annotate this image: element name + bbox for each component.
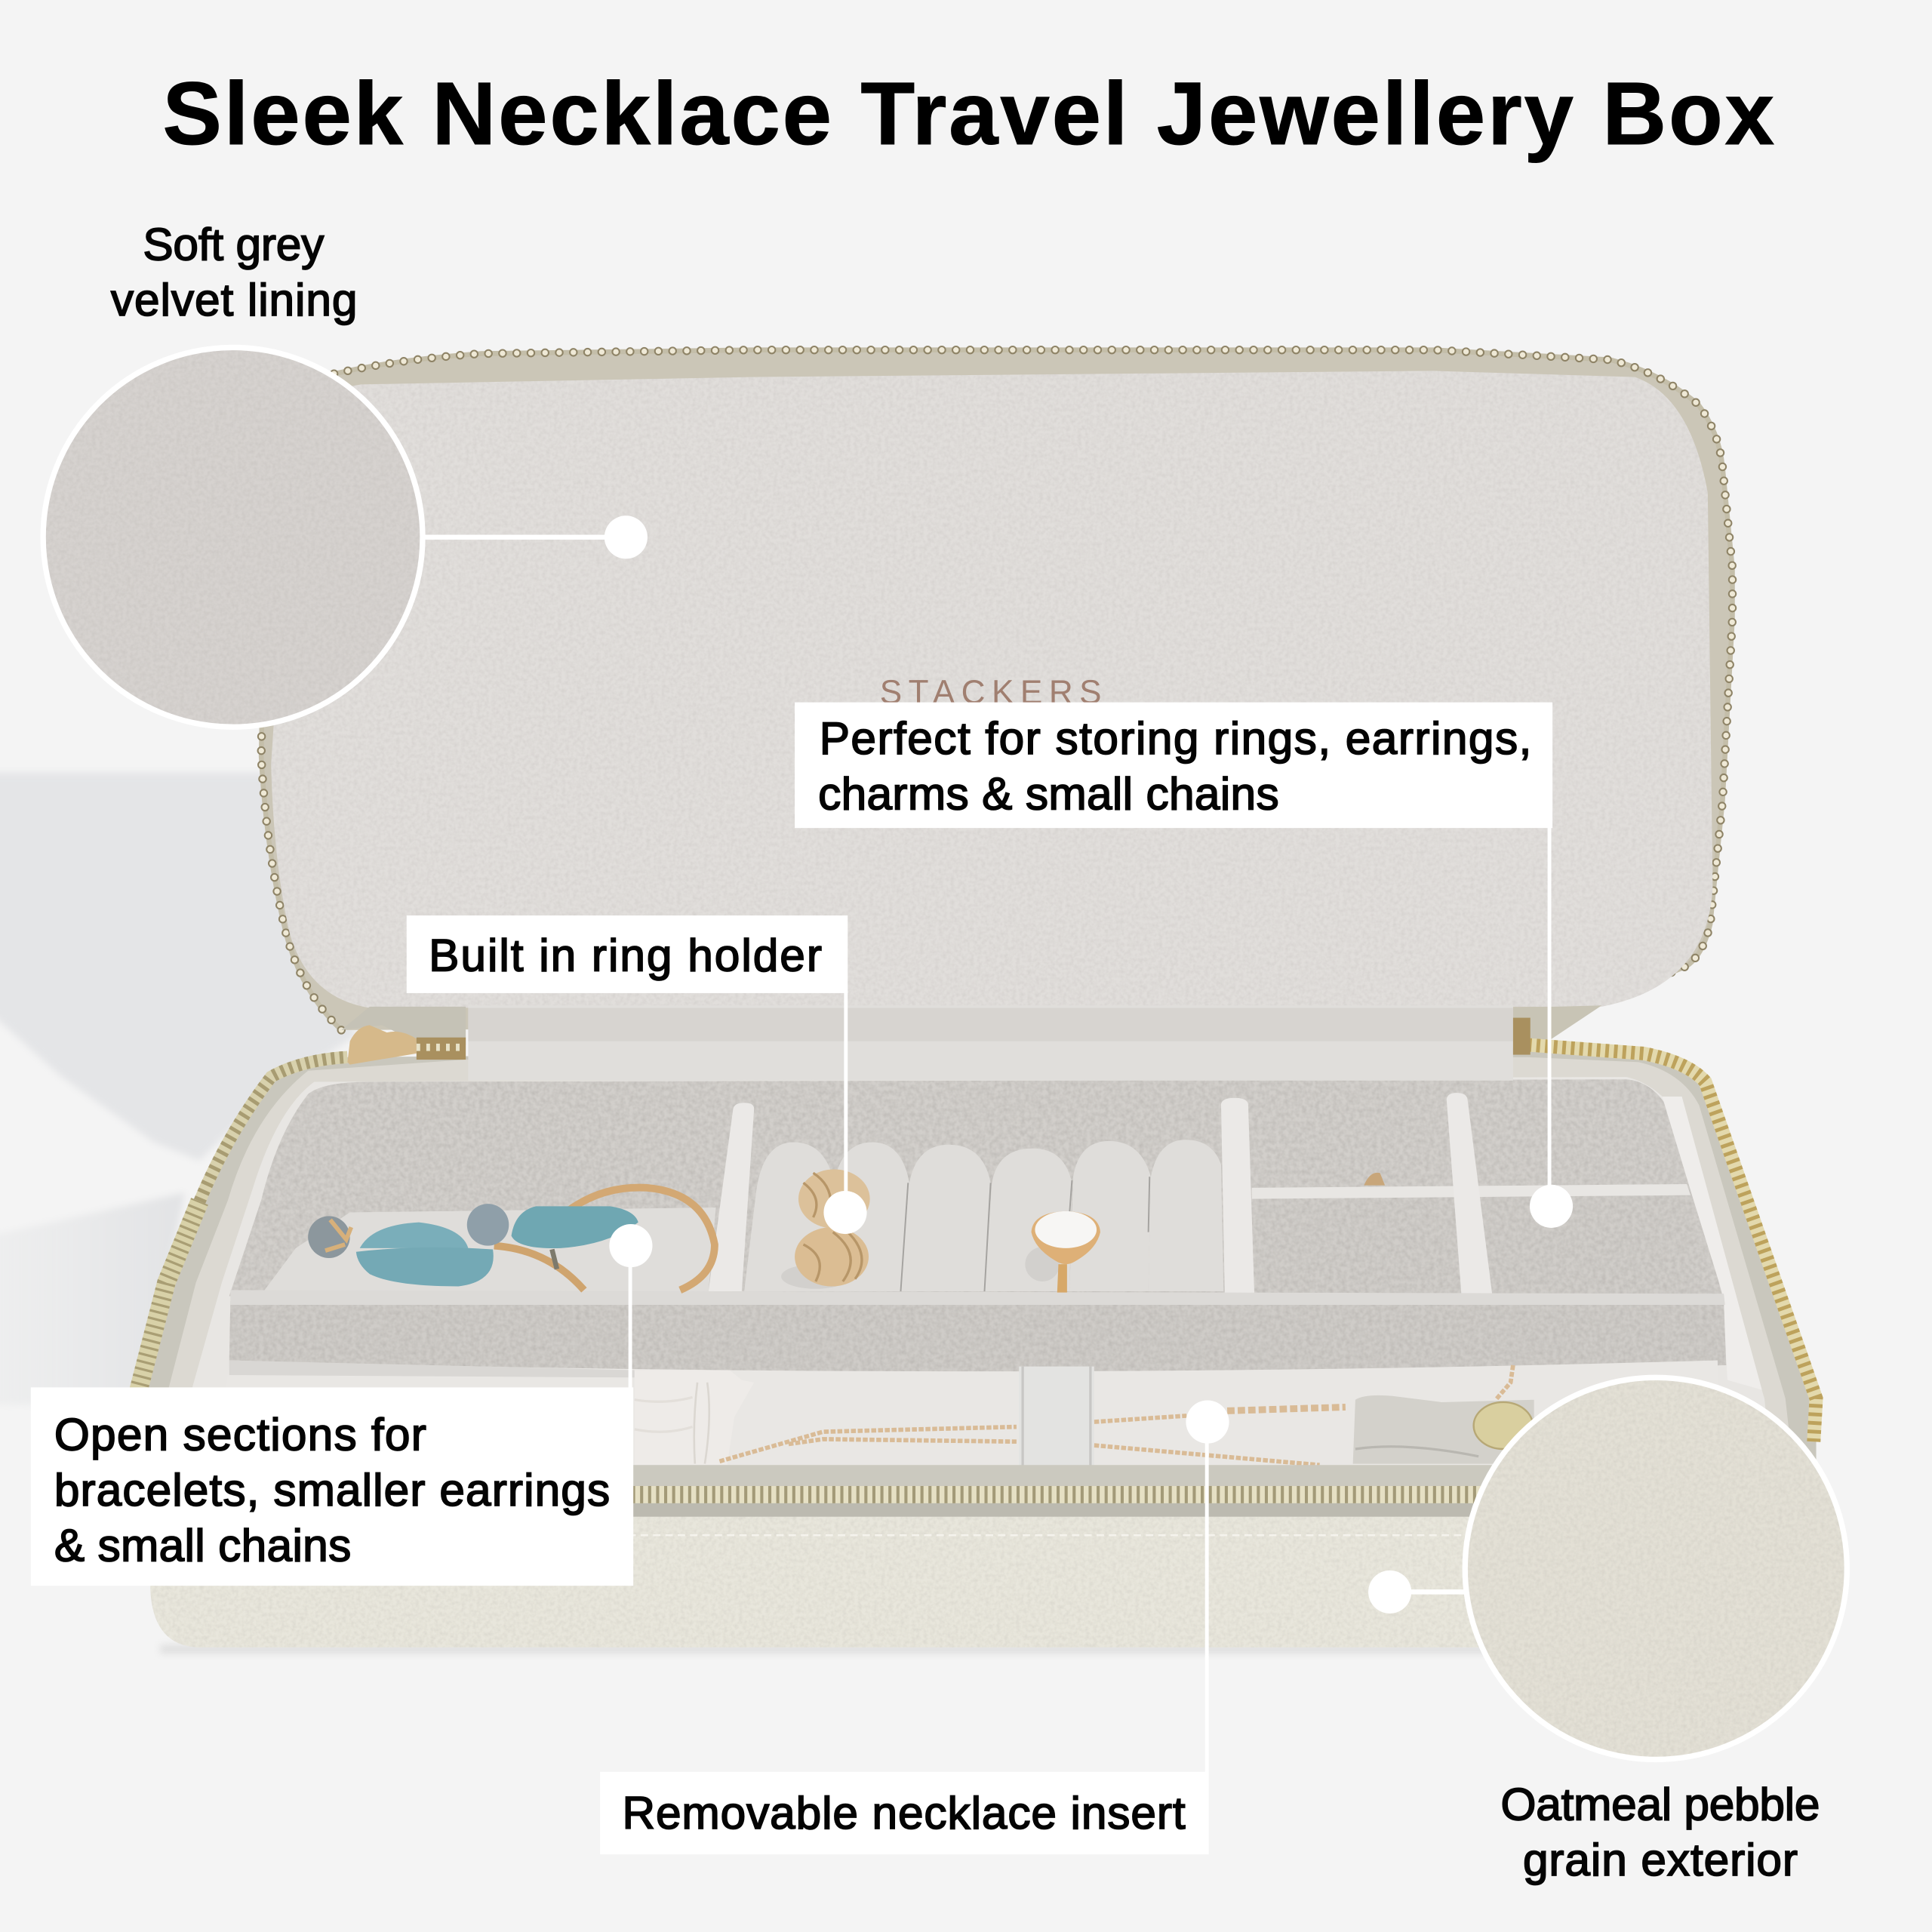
horizontal tray bar <box>229 1290 1726 1372</box>
label: Soft grey <box>143 218 325 269</box>
insert lip <box>185 1465 1774 1487</box>
label line 3: & small chains <box>54 1520 351 1571</box>
marble ring <box>1025 1211 1100 1293</box>
marker dot <box>823 1191 867 1234</box>
left zip tape <box>341 1007 466 1044</box>
connector line <box>1205 1429 1209 1774</box>
right zip tape <box>1513 1005 1601 1055</box>
label line 2: bracelets, smaller earrings <box>54 1464 610 1515</box>
callout: soft grey velvet lining <box>43 218 648 727</box>
setting <box>1032 1211 1100 1264</box>
blue drop right <box>512 1206 638 1248</box>
connector line <box>844 991 848 1200</box>
necklace chains <box>719 1365 1513 1465</box>
leather swatch circle <box>1465 1377 1847 1759</box>
callout: removable necklace insert <box>600 1401 1229 1854</box>
connector line <box>1404 1589 1478 1595</box>
elastic band <box>1019 1367 1094 1467</box>
marker dot <box>609 1224 652 1267</box>
shank <box>1057 1264 1067 1293</box>
label line 2: charms & small chains <box>818 768 1279 820</box>
title: Sleek Necklace Travel Jewellery Box <box>163 64 1774 163</box>
front zipper <box>616 1486 1577 1517</box>
divider right <box>1221 1098 1254 1294</box>
knot ridges <box>803 1173 862 1281</box>
velvet swatch circle <box>43 347 423 727</box>
gold knot earrings <box>781 1169 870 1289</box>
insert raised rim left <box>229 1360 635 1377</box>
blue drop lower <box>356 1247 494 1286</box>
marker dot <box>1530 1185 1573 1228</box>
connector line <box>1548 826 1552 1195</box>
label box <box>31 1387 633 1586</box>
right tray side strip <box>1662 1097 1762 1390</box>
ring shank shadow <box>552 1250 557 1269</box>
roll gaps <box>900 1177 1149 1291</box>
label: Oatmeal pebble <box>1501 1778 1820 1829</box>
callout: built in ring holder <box>407 915 867 1234</box>
connector line <box>629 1257 632 1390</box>
right compartments <box>1252 1093 1698 1294</box>
bottom knot <box>795 1227 869 1286</box>
label box <box>600 1772 1209 1854</box>
grey stone left <box>308 1216 350 1258</box>
second gold ring <box>494 1246 584 1290</box>
marker dot <box>1186 1401 1229 1444</box>
divider left <box>709 1103 754 1291</box>
lid velvet panel <box>271 371 1712 1008</box>
base zipper <box>138 1044 1817 1441</box>
ring roll section <box>709 1098 1254 1294</box>
tray inner surround <box>185 1077 1774 1491</box>
shadow <box>1025 1247 1060 1281</box>
top knot <box>798 1169 870 1229</box>
stitching <box>616 1534 1466 1536</box>
label: Open sections for <box>54 1409 426 1460</box>
necklace insert floor <box>217 1360 1720 1469</box>
label: Built in ring holder <box>429 930 822 981</box>
pouch tag <box>1353 1395 1534 1464</box>
marker dot <box>605 515 648 558</box>
small ring in compartment <box>1364 1173 1385 1186</box>
cast shadows <box>0 773 1515 1654</box>
base rim <box>160 1057 1796 1497</box>
label box <box>795 703 1552 828</box>
shadow <box>781 1264 851 1289</box>
label box <box>407 915 848 993</box>
gold zip pull <box>347 1025 417 1065</box>
gold hoop ring <box>569 1188 715 1290</box>
tray back wall velvet <box>229 1079 1722 1297</box>
marble stone <box>1035 1211 1097 1248</box>
connector line <box>424 535 614 540</box>
callout: perfect for storing <box>795 703 1573 1228</box>
brand stamp: STACKERS <box>880 674 1102 711</box>
callout: open sections <box>31 1224 652 1586</box>
scrunched pocket <box>635 1371 754 1466</box>
label: Removable necklace insert <box>622 1787 1186 1838</box>
label: Perfect for storing rings, earrings, <box>820 712 1531 764</box>
left compartment floor <box>263 1208 716 1291</box>
jewellery box product <box>138 350 1817 1647</box>
zip teeth at hinge <box>417 1018 1531 1060</box>
hinge panel <box>468 1005 1513 1081</box>
label line 2: grain exterior <box>1523 1834 1798 1885</box>
grey stone middle <box>467 1204 509 1246</box>
label line 2: velvet lining <box>111 274 357 325</box>
lid zipper <box>261 350 1733 1030</box>
base shell with zip tape <box>140 1048 1817 1527</box>
blue drop upper <box>360 1223 468 1248</box>
marker dot <box>1368 1571 1411 1614</box>
ring rolls <box>744 1140 1223 1291</box>
blue enamel earrings <box>308 1188 715 1290</box>
prongs <box>325 1220 351 1251</box>
front panel with pebble leather <box>150 1517 1817 1647</box>
callout: oatmeal pebble grain exterior <box>1368 1377 1847 1885</box>
